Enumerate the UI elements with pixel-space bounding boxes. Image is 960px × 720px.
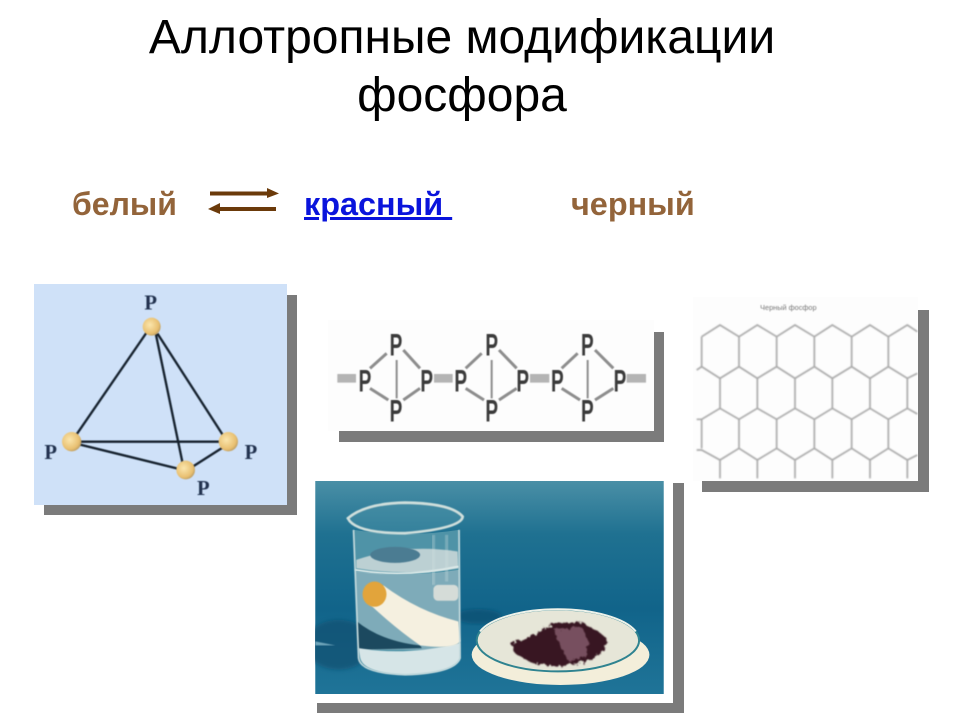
atom labels <box>44 292 258 500</box>
title <box>149 11 775 122</box>
title: фосфора <box>357 69 567 122</box>
atom labels: P <box>144 292 157 314</box>
chain atom labels <box>359 327 626 428</box>
panel: photo of phosphorus samples <box>305 475 684 713</box>
atom labels: P <box>44 442 57 464</box>
chain bonds <box>337 350 646 400</box>
layer caption: Черный фосфор <box>760 303 817 312</box>
hexagon lattice <box>697 325 917 478</box>
title: Аллотропные модификации <box>149 11 775 64</box>
chain atom labels: P <box>516 363 529 398</box>
panel: red phosphorus chain <box>328 320 664 442</box>
chain atom labels: P <box>390 327 402 362</box>
chain atom labels: P <box>485 393 498 428</box>
atom labels: P <box>197 478 210 500</box>
reversible arrows <box>208 188 279 214</box>
chain atom labels: P <box>614 363 626 398</box>
panel: black phosphorus hexagonal layers <box>693 297 929 492</box>
chain atom labels: P <box>454 363 467 398</box>
chain atom labels: P <box>420 363 433 398</box>
phosphorus atoms <box>62 318 238 479</box>
chain atom labels: P <box>581 393 594 428</box>
chain atom labels: P <box>485 327 498 362</box>
photo backdrop <box>315 481 664 694</box>
beaker with white phosphorus <box>348 503 463 675</box>
chain atom labels: P <box>359 363 371 398</box>
atom labels: P <box>245 442 258 464</box>
dish with red phosphorus <box>472 609 649 685</box>
label: white phosphorus: белый <box>72 186 177 222</box>
tetrahedron bonds <box>75 330 227 470</box>
label: black phosphorus: черный <box>571 186 695 222</box>
chain atom labels: P <box>390 393 402 428</box>
chain atom labels: P <box>581 327 594 362</box>
panel: white phosphorus tetrahedron <box>34 284 297 515</box>
label: red phosphorus link: красный <box>304 186 443 222</box>
chain atom labels: P <box>551 363 564 398</box>
